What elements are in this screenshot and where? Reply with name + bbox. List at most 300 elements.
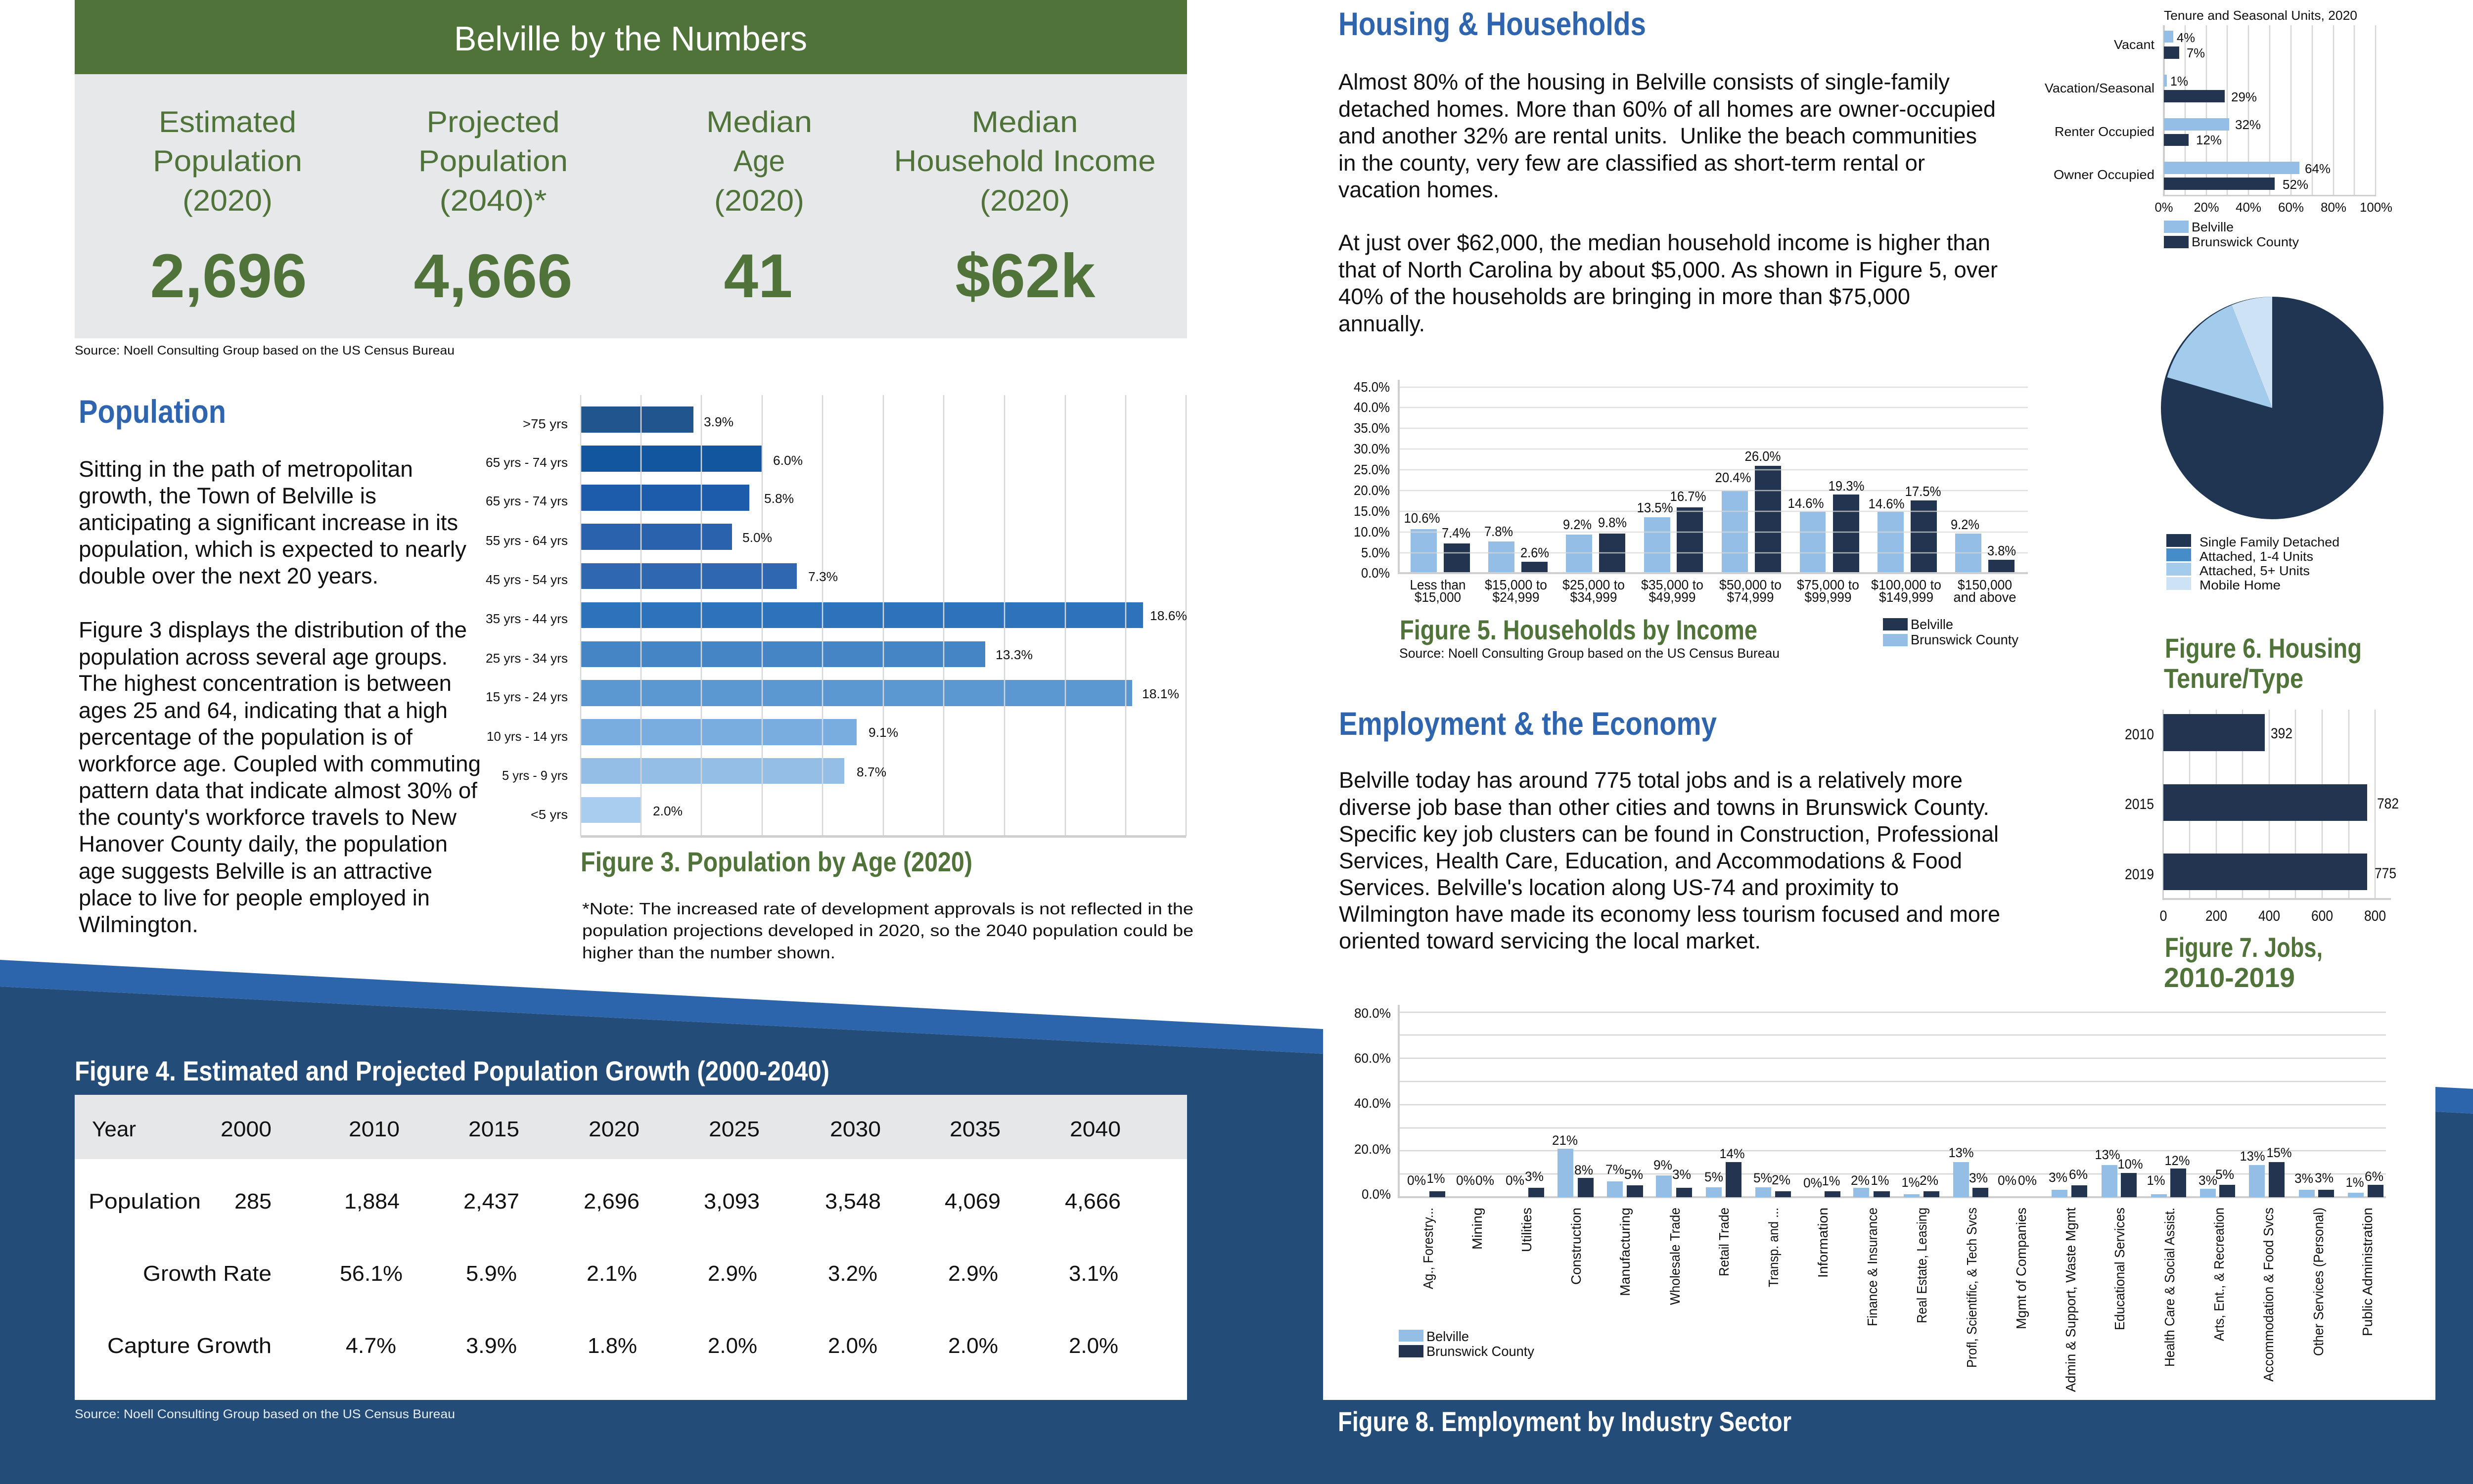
- bar value labels: 13%: [1949, 1145, 1973, 1160]
- table header row: 2035: [950, 1117, 1001, 1141]
- text block: population narrative: Figure 3 displays the distribution of the: [79, 617, 467, 642]
- bar value labels: 7.8%: [1484, 524, 1513, 539]
- bar value labels: 1%: [1426, 1171, 1445, 1186]
- row: capture growth: Capture Growth: [107, 1334, 272, 1358]
- text block: housing narrative: Almost 80% of the housing in Belville consists of single-family: [1338, 69, 1950, 94]
- bar value labels: 9.2%: [1951, 517, 1979, 532]
- stat: projected population: (2040)*: [439, 184, 547, 217]
- income category labels: $35,000 to: [1641, 577, 1703, 592]
- caption: Figure 6: Figure 6. Housing: [2165, 632, 2362, 664]
- bar value labels: 6%: [2365, 1169, 2383, 1184]
- bar value labels: 7.4%: [1442, 525, 1470, 540]
- row: population: 4,666: [1065, 1189, 1121, 1214]
- bar value labels: 9.8%: [1598, 515, 1627, 530]
- income category labels: $75,000 to: [1797, 577, 1859, 592]
- table header row: 2025: [709, 1117, 760, 1141]
- bar value labels: 3%: [2049, 1170, 2067, 1185]
- age category labels: 35 yrs - 44 yrs: [486, 611, 568, 626]
- source note: Source: Noell Consulting Group based on the US Census Bureau: [75, 344, 455, 358]
- caption: Figure 4: Figure 4. Estimated and Projected Population Growth (2000-2040): [75, 1055, 829, 1086]
- note text: [582, 899, 1193, 962]
- bar value labels: 0%: [2018, 1173, 2037, 1188]
- y axis labels: 40.0%: [1354, 1096, 1391, 1111]
- text block: employment narrative: diverse job base than other cities and towns in Brunswick County.: [1339, 795, 1989, 820]
- industry category labels: Construction: [1568, 1208, 1584, 1285]
- bar value labels: 14.6%: [1787, 495, 1824, 511]
- tenure value labels: 29%: [2231, 90, 2257, 104]
- y axis labels: 5.0%: [1361, 545, 1390, 560]
- stat: median household income: Household Income: [894, 144, 1155, 178]
- stat: median age: [706, 105, 812, 311]
- income category labels: $25,000 to: [1562, 577, 1625, 592]
- bar value labels: 13.5%: [1637, 500, 1673, 515]
- legend: Figure 5: Belville: [1911, 617, 1953, 632]
- row: capture growth: 1.8%: [588, 1334, 637, 1358]
- bar value labels: 5%: [2215, 1167, 2234, 1182]
- industry category labels: [1420, 1208, 2375, 1392]
- bar value labels: [1407, 1133, 2383, 1190]
- bar value labels: 13%: [2095, 1147, 2120, 1162]
- tenure x axis labels: 0%: [2154, 200, 2173, 215]
- year labels: 2010: [2125, 726, 2154, 743]
- industry category labels: Transp. and ...: [1766, 1208, 1781, 1287]
- tenure category labels: Owner Occupied: [2054, 167, 2154, 182]
- y axis labels: 45.0%: [1354, 379, 1390, 395]
- bar value labels: 12%: [2164, 1153, 2190, 1168]
- title: Belville by the Numbers: [454, 19, 807, 58]
- value labels: [653, 414, 1187, 818]
- job value labels: 775: [2375, 865, 2396, 882]
- text block: housing narrative: vacation homes.: [1338, 177, 1499, 202]
- y axis labels: 80.0%: [1354, 1006, 1391, 1021]
- heading: Employment & the Economy: Employment & the Economy: [1339, 705, 1717, 742]
- age category labels: [486, 416, 568, 822]
- y axis labels: 35.0%: [1354, 420, 1390, 436]
- stat: median household income: Median: [971, 105, 1078, 138]
- row: growth rate: 3.1%: [1069, 1261, 1118, 1286]
- income category labels: $149,999: [1879, 589, 1933, 605]
- industry category labels: Ag., Forestry...: [1420, 1208, 1436, 1289]
- age category labels: 65 yrs - 74 yrs: [486, 494, 568, 508]
- bar value labels: 3%: [2294, 1171, 2313, 1186]
- bar value labels: 26.0%: [1745, 449, 1781, 464]
- income category labels: $24,999: [1493, 589, 1539, 605]
- bar value labels: 20.4%: [1715, 470, 1751, 485]
- industry category labels: Manufacturing: [1617, 1208, 1633, 1296]
- text block: employment narrative: [1339, 767, 2000, 953]
- row: growth rate: [143, 1261, 1118, 1286]
- caption: Figure 6: [2164, 632, 2362, 694]
- industry category labels: Health Care & Social Assist.: [2162, 1208, 2177, 1367]
- stat: estimated population: (2020): [183, 184, 273, 217]
- caption: Figure 6: Tenure/Type: [2164, 663, 2303, 694]
- value labels: 7.3%: [808, 569, 838, 584]
- industry category labels: Information: [1815, 1208, 1831, 1278]
- value labels: 6.0%: [773, 453, 803, 468]
- job value labels: [2271, 725, 2399, 882]
- bar value labels: 21%: [1552, 1133, 1578, 1148]
- tenure value labels: 12%: [2196, 133, 2222, 147]
- bar chart: tenure and seasonal units: [2045, 25, 2392, 215]
- legend: tenure chart: [2164, 220, 2299, 249]
- text block: population narrative: [78, 456, 481, 937]
- tenure x axis labels: 20%: [2194, 200, 2219, 215]
- y axis labels: 20.0%: [1354, 483, 1390, 498]
- text block: population narrative: population across several age groups.: [79, 644, 448, 670]
- row: population: 3,548: [825, 1189, 881, 1214]
- row: growth rate: 5.9%: [466, 1261, 517, 1286]
- text block: employment narrative: oriented toward servicing the local market.: [1339, 928, 1761, 953]
- income category labels: $99,999: [1804, 589, 1852, 605]
- legend: housing type: Mobile Home: [2199, 578, 2281, 592]
- value labels: 8.7%: [857, 764, 886, 779]
- tenure x axis labels: 60%: [2278, 200, 2304, 215]
- tenure value labels: 52%: [2283, 177, 2308, 192]
- background: dark blue lower band: [0, 960, 2473, 1484]
- jobs x axis labels: 0: [2159, 908, 2167, 924]
- row: growth rate: 2.9%: [948, 1261, 998, 1286]
- tenure value labels: 32%: [2235, 117, 2261, 132]
- bar value labels: 5%: [1753, 1170, 1772, 1185]
- income category labels: $50,000 to: [1719, 577, 1782, 592]
- panel: Belville by the Numbers: [75, 0, 1187, 338]
- bar value labels: 3%: [1525, 1169, 1544, 1184]
- tenure x axis labels: 40%: [2236, 200, 2261, 215]
- jobs x axis labels: [2159, 908, 2386, 924]
- text block: housing narrative: that of North Carolina by about $5,000. As shown in Figure 5, over: [1338, 257, 1998, 282]
- table header row: 2040: [1070, 1117, 1121, 1141]
- stat: median age: (2020): [714, 184, 804, 217]
- tenure category labels: Vacation/Seasonal: [2045, 81, 2154, 95]
- industry category labels: Admin & Support, Waste Mgmt: [2063, 1208, 2078, 1392]
- text block: population narrative: double over the next 20 years.: [79, 563, 378, 588]
- table: population growth: [75, 1095, 1187, 1400]
- bar value labels: 3%: [1969, 1170, 1988, 1185]
- industry category labels: Other Services (Personal): [2311, 1208, 2326, 1356]
- text block: housing narrative: 40% of the households are bringing in more than $75,000: [1338, 284, 1910, 309]
- row: capture growth: 2.0%: [1069, 1334, 1118, 1358]
- bar value labels: 3%: [1672, 1167, 1691, 1182]
- row: population: 1,884: [344, 1189, 400, 1214]
- value labels: 2.0%: [653, 804, 683, 818]
- industry category labels: Arts, Ent., & Recreation: [2211, 1208, 2227, 1341]
- industry category labels: Wholesale Trade: [1667, 1208, 1683, 1305]
- age category labels: <5 yrs: [531, 807, 568, 822]
- heading: Housing & Households: Housing & Households: [1338, 5, 1646, 42]
- row: population: 285: [234, 1189, 272, 1214]
- note text: population projections developed in 2020, so the 2040 population could be: [582, 921, 1193, 940]
- stat: median age: Age: [733, 144, 785, 178]
- text block: employment narrative: Services, Health Care, Education, and Accommodations & Food: [1339, 848, 1962, 873]
- y axis labels: 20.0%: [1354, 1142, 1391, 1157]
- stat: estimated population: [150, 105, 307, 311]
- text block: population narrative: age suggests Belville is an attractive: [79, 858, 432, 884]
- age category labels: 55 yrs - 64 yrs: [486, 533, 568, 548]
- table header row: 2015: [468, 1117, 519, 1141]
- stat: projected population: [413, 105, 573, 311]
- industry category labels: Mgmt of Companies: [2014, 1208, 2029, 1329]
- y axis labels: 30.0%: [1354, 441, 1390, 456]
- bar chart: Figure 7 jobs: [2125, 710, 2399, 924]
- bar value labels: 0%: [1475, 1173, 1494, 1188]
- job value labels: 392: [2271, 725, 2292, 742]
- stat: projected population: Population: [418, 144, 568, 178]
- y axis labels: [1354, 379, 1390, 581]
- bar value labels: 3.8%: [1987, 543, 2016, 558]
- row: growth rate: 2.1%: [587, 1261, 637, 1286]
- legend: Figure 5: [1883, 617, 2018, 647]
- text block: population narrative: anticipating a significant increase in its: [79, 510, 458, 535]
- bar value labels: 0%: [1803, 1175, 1822, 1190]
- row: population: 2,437: [463, 1189, 519, 1214]
- stat: median age: Median: [706, 105, 812, 138]
- text block: population narrative: the county's workforce travels to New: [79, 805, 457, 830]
- y axis labels: 60.0%: [1354, 1051, 1391, 1066]
- note text: *Note: The increased rate of development approvals is not reflected in the: [582, 899, 1193, 918]
- income category labels: Less than: [1410, 577, 1466, 592]
- chart title: tenure and seasonal units: Tenure and Seasonal Units, 2020: [2164, 8, 2357, 23]
- table header row: 2000: [221, 1117, 272, 1141]
- value labels: 3.9%: [704, 414, 733, 429]
- age category labels: 25 yrs - 34 yrs: [486, 651, 568, 666]
- bar value labels: 1%: [2345, 1175, 2364, 1190]
- heading: Population: Population: [79, 393, 226, 430]
- caption: Figure 7: Figure 7. Jobs,: [2165, 932, 2323, 963]
- stat: projected population: Projected: [426, 105, 560, 138]
- bar value labels: 2%: [1920, 1173, 1938, 1188]
- bar value labels: [1404, 449, 2016, 560]
- source note: Figure 5: Source: Noell Consulting Group based on the US Census Bureau: [1399, 646, 1780, 661]
- industry category labels: Real Estate, Leasing: [1914, 1208, 1929, 1323]
- text block: employment narrative: Services. Belville's location along US-74 and proximity to: [1339, 875, 1899, 900]
- bar value labels: 3%: [2315, 1170, 2334, 1185]
- stat: estimated population: 2,696: [150, 242, 307, 311]
- age category labels: 10 yrs - 14 yrs: [487, 729, 568, 744]
- stat: projected population: 4,666: [413, 242, 573, 311]
- bar chart: Figure 8 employment by industry: [1354, 1005, 2386, 1392]
- caption: Figure 3: Figure 3. Population by Age (2020): [581, 846, 972, 877]
- row: population: 4,069: [945, 1189, 1001, 1214]
- income category labels: $150,000: [1958, 577, 2012, 592]
- text block: employment narrative: Wilmington have made its economy less tourism focused and more: [1339, 901, 2000, 927]
- text block: population narrative: pattern data that indicate almost 30% of: [79, 778, 477, 803]
- tenure value labels: 7%: [2187, 45, 2205, 60]
- text block: population narrative: workforce age. Coupled with commuting: [78, 751, 481, 776]
- text block: population narrative: Wilmington.: [79, 912, 198, 937]
- legend: housing type: [2166, 534, 2339, 592]
- industry bars: [1429, 1149, 2383, 1197]
- bar value labels: 5%: [1624, 1167, 1643, 1182]
- jobs x axis labels: 400: [2258, 908, 2280, 924]
- age category labels: 65 yrs - 74 yrs: [486, 455, 568, 470]
- text block: population narrative: Sitting in the path of metropolitan: [79, 456, 413, 482]
- bar value labels: 3%: [2198, 1173, 2217, 1188]
- row: population: 2,696: [584, 1189, 640, 1214]
- age category labels: 15 yrs - 24 yrs: [486, 689, 568, 704]
- bar value labels: 8%: [1574, 1163, 1593, 1177]
- bar value labels: 15%: [2266, 1145, 2292, 1160]
- bar value labels: 17.5%: [1905, 484, 1941, 499]
- tenure category labels: Renter Occupied: [2055, 124, 2154, 139]
- text block: housing narrative: At just over $62,000, the median household income is higher than: [1338, 230, 1990, 255]
- age category labels: >75 yrs: [523, 416, 568, 431]
- industry category labels: Educational Services: [2112, 1208, 2127, 1330]
- text block: employment narrative: Belville today has around 775 total jobs and is a relatively more: [1339, 767, 1963, 793]
- caption: Figure 5: Figure 5. Households by Income: [1400, 614, 1757, 645]
- row: capture growth: 3.9%: [466, 1334, 517, 1358]
- stat: estimated population: Population: [153, 144, 302, 178]
- row: population: [89, 1189, 1121, 1214]
- tenure value labels: [2170, 30, 2331, 192]
- bar value labels: 0%: [1506, 1173, 1524, 1188]
- tenure value labels: 64%: [2305, 161, 2331, 176]
- stat: estimated population: Estimated: [159, 105, 296, 138]
- bar value labels: 10.6%: [1404, 510, 1440, 526]
- row: capture growth: [107, 1334, 1118, 1358]
- bar value labels: 1%: [2147, 1173, 2165, 1188]
- industry category labels: Utilities: [1519, 1208, 1534, 1252]
- job value labels: 782: [2377, 796, 2399, 812]
- text block: population narrative: population, which is expected to nearly: [79, 537, 466, 562]
- legend: Figure 5: Brunswick County: [1911, 632, 2018, 647]
- table header row: Year: [92, 1117, 136, 1141]
- stat: median age: 41: [724, 242, 792, 311]
- tenure category labels: [2045, 37, 2155, 182]
- tenure x axis labels: 80%: [2321, 200, 2346, 215]
- legend: Figure 8: [1399, 1329, 1534, 1359]
- text block: population narrative: percentage of the population is of: [79, 724, 412, 750]
- text block: housing narrative: annually.: [1338, 311, 1425, 336]
- bar value labels: 0%: [1407, 1173, 1426, 1188]
- bar value labels: 1%: [1871, 1173, 1889, 1188]
- bar value labels: 16.7%: [1670, 489, 1706, 504]
- source note on dark band: Source: Noell Consulting Group based on the US Census Bureau: [75, 1407, 455, 1421]
- income category labels: $15,000 to: [1485, 577, 1547, 592]
- row: population: Population: [89, 1189, 201, 1214]
- stat: median household income: (2020): [980, 184, 1070, 217]
- legend: tenure chart: Belville: [2192, 220, 2234, 234]
- jobs x axis labels: 200: [2205, 908, 2227, 924]
- bar value labels: 5%: [1704, 1169, 1723, 1184]
- table header row: 2010: [349, 1117, 400, 1141]
- row: capture growth: 4.7%: [346, 1334, 396, 1358]
- age category labels: 45 yrs - 54 yrs: [486, 572, 568, 587]
- text block: housing narrative: and another 32% are rental units. Unlike the beach communities: [1338, 123, 1977, 148]
- bar value labels: 19.3%: [1828, 478, 1865, 494]
- income category labels: $74,999: [1727, 589, 1774, 605]
- note text: higher than the number shown.: [582, 944, 835, 962]
- y axis labels: 25.0%: [1354, 462, 1390, 477]
- bar value labels: 1%: [1822, 1173, 1840, 1188]
- tenure value labels: 4%: [2177, 30, 2195, 45]
- bar value labels: 7%: [1605, 1162, 1624, 1177]
- tenure x axis labels: [2154, 200, 2392, 215]
- text block: housing narrative: detached homes. More than 60% of all homes are owner-occupied: [1338, 96, 1996, 122]
- bar chart: Figure 5 households by income: [1354, 379, 2028, 605]
- caption: Figure 7: [2164, 932, 2323, 993]
- bar value labels: 0%: [1998, 1173, 2016, 1188]
- y axis labels: 40.0%: [1354, 400, 1390, 415]
- bar value labels: 6%: [2069, 1167, 2088, 1182]
- legend: Figure 8: Brunswick County: [1426, 1344, 1534, 1359]
- text block: housing narrative: in the county, very few are classified as short-term rental or: [1338, 150, 1925, 176]
- bar value labels: 1%: [1901, 1175, 1920, 1190]
- bar value labels: 2.6%: [1520, 545, 1549, 560]
- jobs x axis labels: 800: [2364, 908, 2386, 924]
- text block: housing narrative: [1338, 69, 1998, 336]
- bar value labels: 9%: [1653, 1158, 1672, 1172]
- industry category labels: Retail Trade: [1716, 1208, 1732, 1276]
- bar value labels: 9.2%: [1563, 517, 1592, 532]
- income bars: [1411, 466, 2015, 573]
- text block: population narrative: Hanover County daily, the population: [79, 831, 448, 856]
- text block: population narrative: ages 25 and 64, indicating that a high: [79, 698, 448, 723]
- year labels: 2015: [2125, 796, 2154, 812]
- income category labels: $49,999: [1649, 589, 1695, 605]
- text block: employment narrative: Specific key job clusters can be found in Construction, Professional: [1339, 821, 1999, 847]
- age category labels: 5 yrs - 9 yrs: [502, 768, 568, 783]
- bar chart: Figure 3 population by age: [486, 395, 1187, 838]
- value labels: 5.0%: [742, 530, 772, 545]
- tenure category labels: Vacant: [2114, 37, 2155, 52]
- value labels: 18.6%: [1150, 608, 1187, 623]
- value labels: 13.3%: [996, 647, 1033, 662]
- industry category labels: Public Administration: [2360, 1208, 2375, 1336]
- table header row: [92, 1117, 1121, 1141]
- year labels: 2019: [2125, 866, 2154, 883]
- industry category labels: Mining: [1469, 1208, 1485, 1250]
- y axis labels: 15.0%: [1354, 503, 1390, 519]
- legend: housing type: Attached, 1-4 Units: [2199, 549, 2313, 564]
- bar value labels: 10%: [2118, 1157, 2143, 1171]
- row: capture growth: 2.0%: [948, 1334, 998, 1358]
- income category labels: and above: [1954, 589, 2016, 605]
- row: growth rate: Growth Rate: [143, 1261, 272, 1286]
- bar value labels: 13%: [2240, 1149, 2265, 1164]
- y axis labels: [1354, 1006, 1391, 1202]
- bar value labels: 0%: [1456, 1173, 1475, 1188]
- stat: median household income: [894, 105, 1155, 311]
- y axis labels: 0.0%: [1361, 565, 1390, 581]
- pie chart: housing type: [2161, 297, 2383, 519]
- text block: population narrative: growth, the Town of Belville is: [79, 483, 376, 508]
- value labels: 9.1%: [869, 725, 898, 740]
- row: capture growth: 2.0%: [708, 1334, 757, 1358]
- text block: population narrative: The highest concentration is between: [79, 671, 452, 696]
- bar value labels: 14%: [1719, 1146, 1745, 1161]
- income category labels: $100,000 to: [1871, 577, 1941, 592]
- income category labels: $15,000: [1415, 589, 1461, 605]
- y axis labels: 0.0%: [1362, 1187, 1391, 1202]
- row: growth rate: 56.1%: [340, 1261, 403, 1286]
- row: population: 3,093: [704, 1189, 760, 1214]
- bar value labels: 14.6%: [1869, 496, 1904, 511]
- industry category labels: Finance & Insurance: [1865, 1208, 1880, 1326]
- row: capture growth: 2.0%: [828, 1334, 877, 1358]
- jobs x axis labels: 600: [2311, 908, 2333, 924]
- table header row: 2020: [589, 1117, 640, 1141]
- legend: Figure 8: Belville: [1426, 1329, 1469, 1344]
- legend: housing type: Attached, 5+ Units: [2199, 563, 2310, 578]
- table header row: 2030: [830, 1117, 881, 1141]
- year labels: [2125, 726, 2154, 883]
- row: growth rate: 2.9%: [708, 1261, 757, 1286]
- income category labels: $34,999: [1570, 589, 1617, 605]
- industry category labels: Profl, Scientific, & Tech Svcs: [1964, 1208, 1979, 1368]
- income category labels: [1410, 577, 2016, 605]
- value labels: 5.8%: [764, 491, 794, 506]
- legend: housing type: Single Family Detached: [2199, 535, 2339, 549]
